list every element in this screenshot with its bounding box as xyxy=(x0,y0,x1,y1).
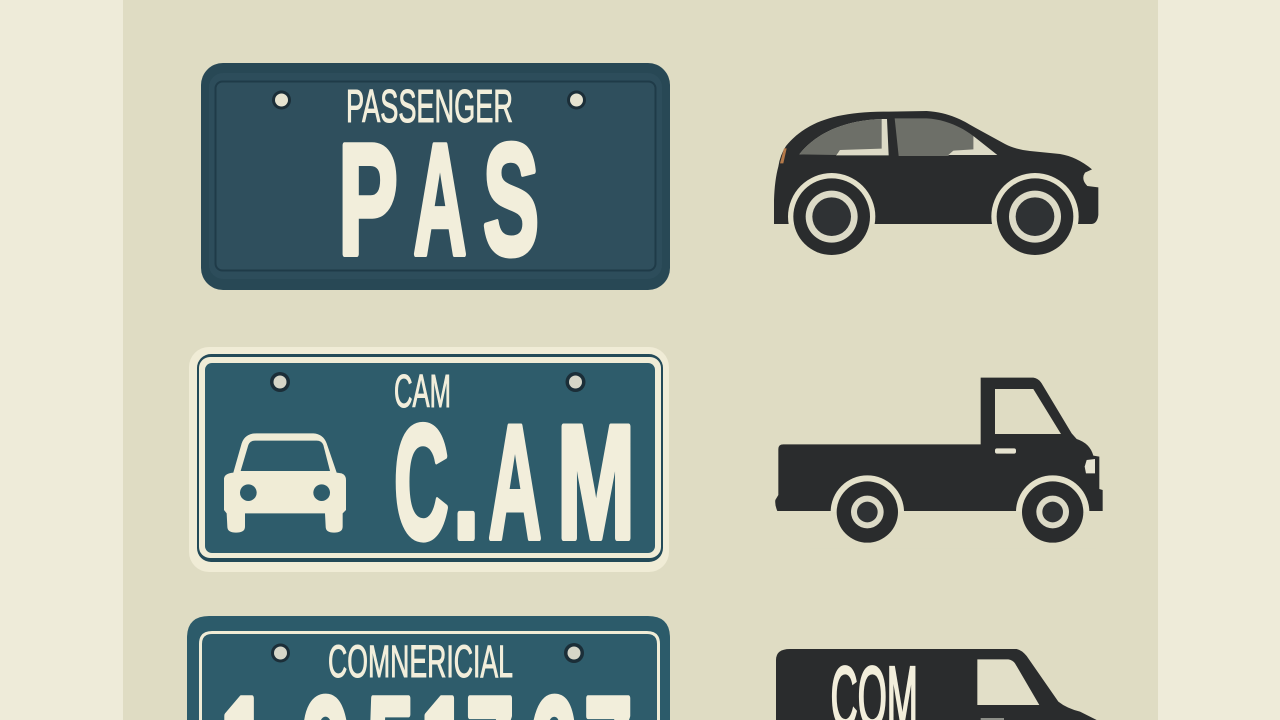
plate code: C.AM: . xyxy=(453,392,480,573)
icon: passenger car xyxy=(774,111,1098,261)
plate caption: CAM: CAM xyxy=(394,365,451,417)
plate code: C.AM: M xyxy=(557,392,635,573)
plate code: C.AM: A xyxy=(488,392,542,573)
plate code: C.AM xyxy=(394,392,635,573)
panel: passenger plate xyxy=(201,63,670,290)
plate code: PAS: A xyxy=(414,112,466,288)
icon: plate holes xyxy=(270,372,586,392)
plate caption: PASSENGER: PASSENGER xyxy=(346,80,513,132)
plate code: PAS: S xyxy=(483,112,539,288)
icon: plate holes xyxy=(271,643,584,663)
plate code: C.AM: C xyxy=(394,392,449,573)
icon: front view car xyxy=(224,433,346,533)
icon: delivery van xyxy=(776,649,1097,720)
plate code: PAS xyxy=(338,112,539,288)
panel: commercial plate xyxy=(187,616,670,720)
plate caption: COMNERICIAL: COMNERICIAL xyxy=(328,636,513,687)
panel: CAM plate xyxy=(189,347,669,573)
plate code: PAS: P xyxy=(338,112,398,288)
icon: pickup truck xyxy=(775,378,1103,549)
icon: plate holes xyxy=(272,90,586,110)
